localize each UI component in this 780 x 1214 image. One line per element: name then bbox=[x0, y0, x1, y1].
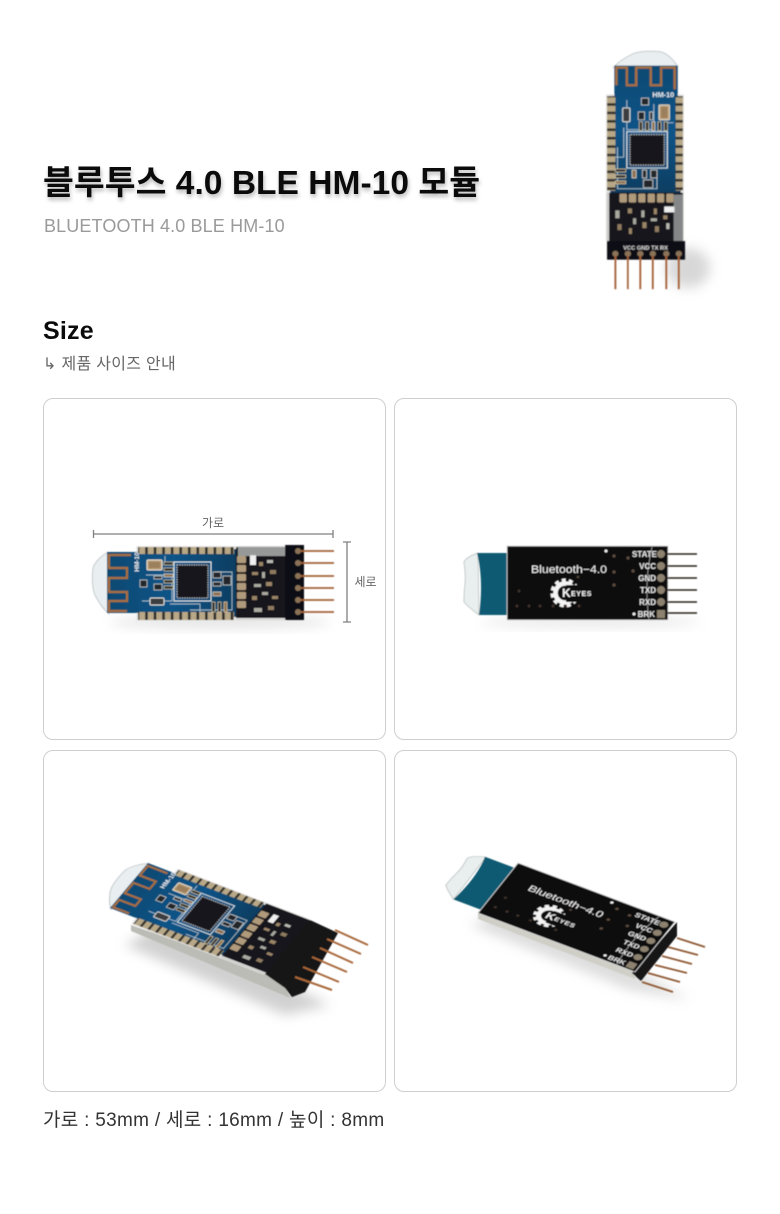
product photo: module top view: HM-10 bbox=[652, 91, 674, 99]
module front: HM-10 bbox=[134, 552, 141, 572]
module back: BRK bbox=[638, 610, 655, 619]
panel: front view with dimensions bbox=[43, 398, 386, 740]
module back: RXD bbox=[639, 598, 656, 607]
section caption: ↳ 제품 사이즈 안내 bbox=[43, 356, 176, 373]
module angled back: GND bbox=[626, 930, 649, 943]
module angled front: HM-10 bbox=[159, 872, 179, 890]
module angled front bbox=[92, 854, 368, 998]
module back: GND bbox=[638, 574, 656, 583]
panel: front angled view bbox=[43, 750, 386, 1092]
module back: Bluetooth−4.0 bbox=[531, 564, 607, 576]
panel: back view bbox=[394, 398, 737, 740]
module back: STATE bbox=[632, 550, 658, 559]
section heading: Size: Size bbox=[43, 317, 94, 345]
size specification text: 가로 : 53mm / 세로 : 16mm / 높이 : 8mm bbox=[43, 1110, 384, 1131]
title: 블루투스 4.0 BLE HM-10 모듈 bbox=[43, 165, 480, 202]
product photo: module top view: VCC GND TX RX bbox=[623, 246, 668, 252]
module angled back: TXD bbox=[621, 938, 642, 951]
module back: K bbox=[562, 586, 571, 600]
module angled back: BRK bbox=[606, 954, 628, 967]
height dimension bbox=[343, 542, 377, 622]
module back: TXD bbox=[640, 586, 656, 595]
width dimension bbox=[94, 516, 333, 538]
module angled back: K bbox=[542, 911, 558, 923]
module angled back: EYES bbox=[552, 917, 577, 929]
module back bbox=[464, 546, 697, 620]
module front bbox=[92, 545, 334, 621]
module back: VCC bbox=[639, 562, 656, 571]
product photo: module top view bbox=[606, 50, 714, 292]
module angled back: STATE bbox=[633, 911, 662, 927]
module angled back: RXD bbox=[614, 946, 636, 959]
height dimension: 세로 bbox=[354, 575, 377, 589]
panel: back angled view bbox=[394, 750, 737, 1092]
module angled back: Bluetooth−4.0 bbox=[525, 884, 606, 920]
module back: EYES bbox=[571, 591, 592, 598]
module angled back bbox=[436, 847, 705, 992]
width dimension: 가로 bbox=[202, 516, 224, 530]
module angled back: VCC bbox=[633, 922, 655, 935]
subtitle: BLUETOOTH 4.0 BLE HM-10 bbox=[44, 216, 285, 236]
